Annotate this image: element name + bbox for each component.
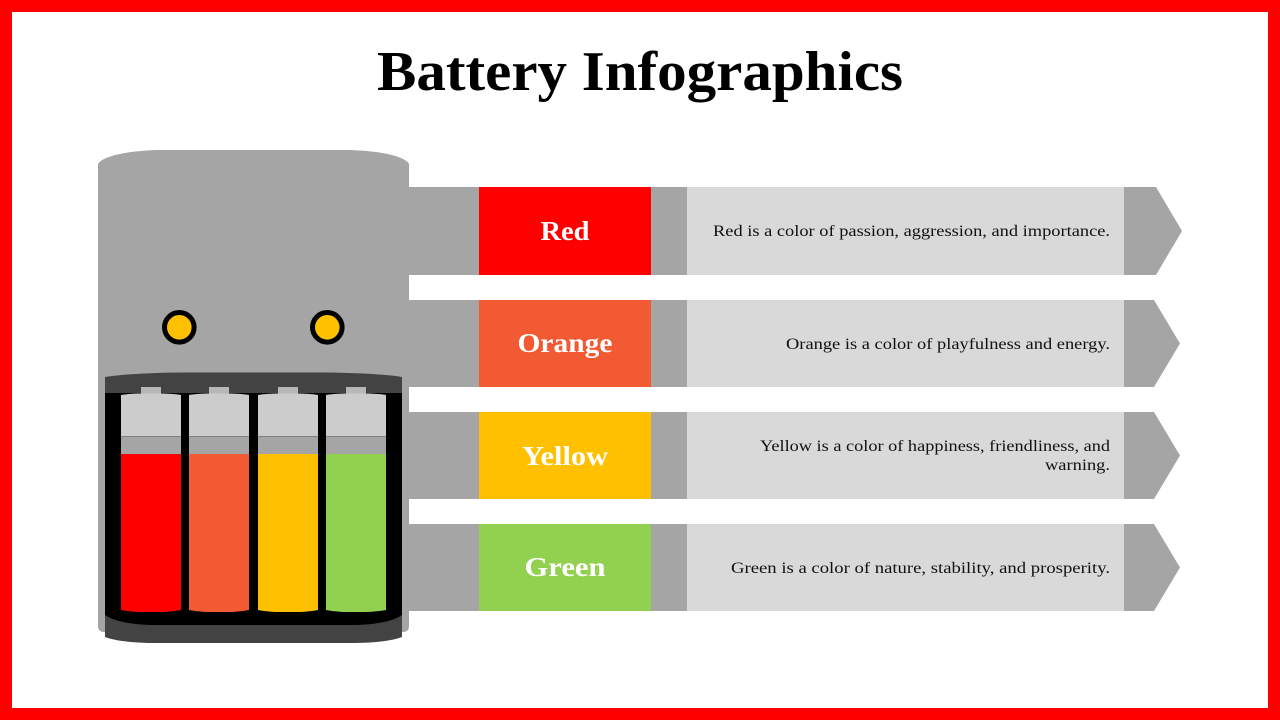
row: yellow: warning. bbox=[1045, 457, 1110, 474]
battery charger bbox=[98, 150, 409, 643]
charger body bbox=[98, 150, 409, 632]
row: orange bbox=[405, 300, 1180, 387]
row: yellow: Yellow is a color of happiness, friendliness, and bbox=[760, 438, 1110, 455]
charger tray interior bbox=[105, 390, 402, 625]
row: green: Green is a color of nature, stability, and prosperity. bbox=[731, 560, 1110, 577]
battery: red bbox=[121, 387, 181, 612]
battery: orange bbox=[189, 387, 249, 612]
charger tray lid bbox=[105, 372, 402, 393]
row: green bbox=[405, 524, 1180, 611]
row: yellow bbox=[405, 412, 1180, 499]
battery: green bbox=[326, 387, 386, 612]
row: orange: Orange is a color of playfulness and energy. bbox=[786, 336, 1110, 353]
row: yellow: Yellow bbox=[522, 441, 609, 471]
battery: yellow bbox=[258, 387, 318, 612]
charger tray base bbox=[105, 610, 402, 643]
icon: indicator light right bbox=[312, 312, 342, 342]
row: red: Red is a color of passion, aggression, and importance. bbox=[713, 223, 1110, 240]
title: Battery Infographics bbox=[377, 41, 903, 103]
row: red bbox=[405, 187, 1182, 275]
row: red: Red bbox=[540, 216, 590, 246]
icon: indicator light left bbox=[164, 312, 194, 342]
panel: row connectors and arrows bbox=[405, 187, 1182, 611]
row: orange: Orange bbox=[518, 328, 613, 358]
row: green: Green bbox=[524, 552, 606, 582]
